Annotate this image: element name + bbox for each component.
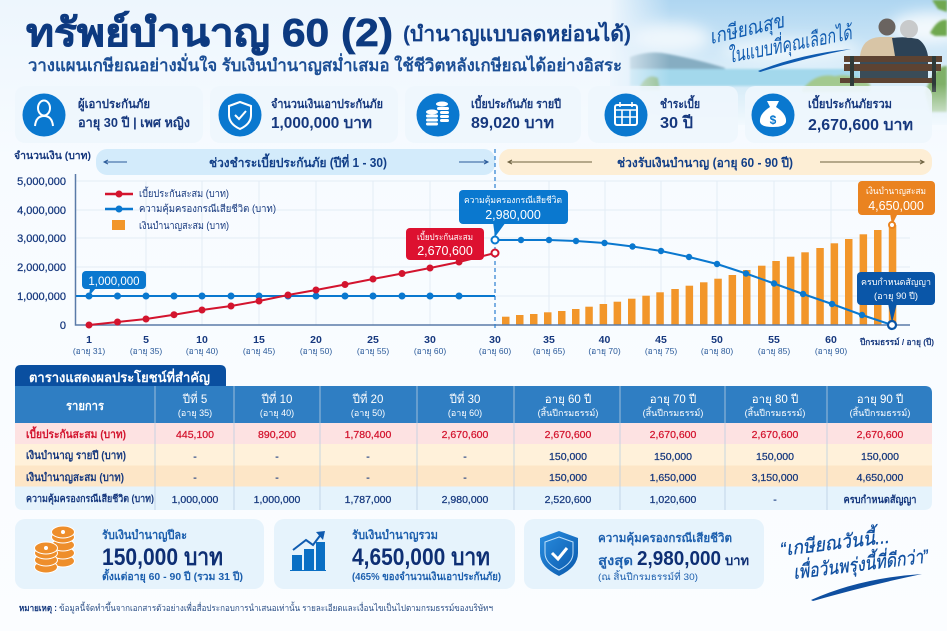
summary card: annual pension: รับเงินบำนาญปีละ (102, 528, 187, 542)
x axis labels: 20 (310, 334, 322, 346)
x axis labels: (อายุ 75) (645, 346, 677, 357)
table row: death coverage: ครบกำหนดสัญญา (844, 494, 917, 506)
callout: accumulated premium (406, 228, 484, 260)
info card: payment term (588, 86, 738, 143)
x axis labels: 40 (599, 334, 610, 346)
callout: accumulated pension (858, 181, 935, 225)
table row: accumulated pension: เงินบำนาญสะสม (บาท) (26, 471, 124, 484)
table header row: อายุ 90 ปี (857, 393, 903, 406)
table header row: (สิ้นปีกรมธรรม์) (643, 406, 703, 418)
summary card: total pension: (465% ของจำนวนเงินเอาประกันภัย) (352, 571, 501, 583)
table header row: อายุ 60 ปี (545, 393, 591, 406)
callout: accumulated pension: 4,650,000 (868, 199, 924, 213)
callout: accumulated premium: 2,670,600 (417, 244, 473, 258)
table row: accumulated premium: 445,100 (176, 429, 214, 441)
table row: death coverage: 2,980,000 (442, 494, 489, 506)
photo: retired couple on bench by the sea (610, 0, 947, 130)
callout: 1,000,000 (82, 271, 146, 296)
summary card: annual pension: ตั้งแต่อายุ 60 - 90 ปี (รวม 31 ปี) (102, 568, 243, 584)
table row: accumulated pension: - (275, 472, 279, 484)
callout: death coverage (459, 190, 568, 237)
summary card: maximum coverage: บาท (725, 553, 749, 568)
table row: accumulated pension: 150,000 (549, 472, 587, 484)
info card: annual premium: 89,020 บาท (471, 115, 554, 132)
table header row: (อายุ 50) (351, 408, 385, 419)
callout: death coverage: 2,980,000 (485, 208, 541, 222)
footnote: หมายเหตุ : ข้อมูลนี้จัดทำขึ้นจากเอกสารตัวอย่างเพื่อสื่อประกอบการนำเสนอเท่านั้น รายละเอียดและเงื่อนไขเป็นไปตามกรมธรรม์ของบริษัทฯ (19, 601, 493, 614)
table row: death coverage: 1,787,000 (345, 494, 392, 506)
summary card: total pension: รับเงินบำนาญรวม (352, 528, 438, 542)
person: man (860, 18, 904, 56)
table row: annual pension: - (275, 451, 279, 463)
table: key benefits (15, 365, 932, 510)
x axis labels: (อายุ 31) (73, 346, 105, 357)
table heading tab (15, 365, 226, 387)
table row: annual pension: - (463, 451, 467, 463)
x axis labels: 60 (825, 334, 837, 346)
summary card: annual pension: 150,000 บาท (102, 544, 223, 571)
table header row: อายุ 80 ปี (752, 393, 798, 406)
y axis labels: 4,000,000 (17, 205, 66, 217)
table row: accumulated pension: - (463, 472, 467, 484)
table row: death coverage: - (773, 494, 777, 506)
summary card: total pension (274, 519, 515, 589)
x axis labels: (อายุ 40) (186, 346, 218, 357)
x axis labels: 10 (196, 334, 208, 346)
table row: accumulated premium: 2,670,600 (857, 429, 904, 441)
table header row: ปีที่ 10 (261, 391, 292, 406)
legend: เงินบำนาญสะสม (บาท) (139, 221, 229, 232)
table row: annual pension: 150,000 (654, 451, 692, 463)
icon: person (22, 94, 66, 136)
title: (บำนาญแบบลดหย่อนได้) (403, 21, 631, 47)
table row: death coverage: 1,020,600 (650, 494, 697, 506)
band: premium payment period: ช่วงชำระเบี้ยประกันภัย (ปีที่ 1 - 30) (209, 153, 387, 170)
info card: payment term: ชำระเบี้ย (660, 94, 700, 111)
line: death coverage before age 60 (76, 292, 495, 300)
callout: accumulated pension: เงินบำนาญสะสม (866, 186, 926, 196)
x axis labels: 35 (543, 334, 555, 346)
icon: orange coins (34, 526, 74, 573)
icon: coins (416, 94, 460, 136)
x axis labels: 25 (367, 334, 379, 346)
callout: contract maturity: (อายุ 90 ปี) (874, 291, 918, 302)
info card: insured person (15, 86, 203, 143)
info card: insured person: อายุ 30 ปี | เพศ หญิง (78, 115, 190, 131)
x axis labels: 55 (768, 334, 780, 346)
x axis labels: (อายุ 35) (130, 346, 162, 357)
table row: accumulated premium: 2,670,600 (442, 429, 489, 441)
table row: accumulated pension: 1,650,000 (650, 472, 697, 484)
icon: money bag (752, 94, 794, 136)
table header row: อายุ 70 ปี (650, 393, 696, 406)
info card: payment term: 30 ปี (660, 113, 693, 132)
table row: death coverage: 1,000,000 (254, 494, 301, 506)
callout: contract maturity: ครบกำหนดสัญญา (861, 277, 931, 287)
bars: accumulated pension (502, 225, 896, 325)
title: ทรัพย์บำนาญ 60 (2) (26, 10, 393, 56)
person: woman (892, 20, 928, 56)
x axis labels (73, 334, 847, 357)
x axis labels: 50 (711, 334, 723, 346)
x axis labels: (อายุ 55) (357, 346, 389, 357)
band: pension period (499, 149, 932, 175)
legend: เบี้ยประกันสะสม (บาท) (139, 186, 229, 200)
x axis labels: (อายุ 65) (533, 346, 565, 357)
table row: accumulated pension: 4,650,000 (857, 472, 904, 484)
info card: total premium: 2,670,600 บาท (808, 117, 913, 134)
x axis labels: (อายุ 90) (815, 346, 847, 357)
info card: insured person: ผู้เอาประกันภัย (78, 97, 150, 112)
icon: growth chart (290, 531, 326, 570)
band: premium payment period (96, 149, 495, 175)
x axis labels: (อายุ 60) (479, 346, 511, 357)
table row: accumulated premium: 2,670,600 (545, 429, 592, 441)
table row: accumulated premium: 890,200 (258, 429, 296, 441)
table row: accumulated premium (15, 423, 932, 444)
callout: contract maturity (857, 272, 935, 323)
axis title: จำนวนเงิน (บาท) (14, 150, 91, 162)
summary card: maximum coverage: สูงสุด (598, 553, 633, 569)
line: accumulated premium (86, 253, 495, 328)
x axis labels: (อายุ 50) (300, 346, 332, 357)
summary card: maximum coverage: ความคุ้มครองกรณีเสียชีวิต (598, 531, 732, 546)
info card: total premium: เบี้ยประกันภัยรวม (808, 94, 892, 111)
title (26, 10, 631, 56)
table row: annual pension: - (366, 451, 370, 463)
x axis labels: (อายุ 45) (243, 346, 275, 357)
callout: 1,000,000: 1,000,000 (88, 276, 140, 288)
x axis labels: (อายุ 70) (588, 346, 621, 357)
x axis labels: 15 (253, 334, 265, 346)
table header row: (อายุ 60) (448, 408, 482, 419)
info card: sum insured (210, 86, 398, 143)
x axis labels: (อายุ 80) (701, 346, 733, 357)
table row: accumulated premium: 2,670,600 (752, 429, 799, 441)
table row: accumulated premium: 1,780,400 (345, 429, 392, 441)
table row: accumulated pension: - (366, 472, 370, 484)
y axis labels: 5,000,000 (17, 176, 66, 188)
chart: premiums, death coverage, accumulated pension: ปีกรมธรรม์ / อายุ (ปี) (860, 337, 934, 348)
summary card: maximum coverage: 2,980,000 (637, 548, 721, 570)
summary card: maximum coverage (524, 519, 764, 589)
icon: calendar (604, 94, 648, 136)
chart: premiums, death coverage, accumulated pension (14, 149, 935, 357)
info card: annual premium: เบี้ยประกันภัย รายปี (471, 94, 561, 111)
table row: annual pension: 150,000 (549, 451, 587, 463)
line: death coverage after age 60 (495, 237, 892, 325)
x axis labels: (อายุ 60) (414, 346, 446, 357)
slogan: retire happy: ในแบบที่คุณเลือกได้ (725, 18, 857, 69)
slogan: retire happy (707, 10, 857, 72)
x axis labels: (อายุ 85) (758, 346, 790, 357)
table row: death coverage: 1,000,000 (172, 494, 219, 506)
band: pension period: ช่วงรับเงินบำนาญ (อายุ 60 - 90 ปี) (617, 156, 793, 171)
table row: accumulated pension: - (193, 472, 197, 484)
icon: blue shield (540, 531, 578, 576)
table header row: ปีที่ 30 (449, 391, 480, 406)
legend (105, 186, 276, 232)
table header row: (อายุ 40) (260, 408, 294, 419)
table row: accumulated pension: 3,150,000 (752, 472, 799, 484)
y axis labels: 2,000,000 (17, 262, 66, 274)
icon: shield (218, 94, 262, 136)
y axis labels: 0 (60, 320, 66, 332)
x axis labels: 30 (424, 334, 436, 346)
table header row: ปีที่ 20 (352, 391, 383, 406)
subtitle: วางแผนเกษียณอย่างมั่นใจ รับเงินบำนาญสม่ำเสมอ ใช้ชีวิตหลังเกษียณได้อย่างอิสระ (28, 53, 622, 76)
info card: annual premium (405, 86, 581, 143)
icon: money bag: $ (770, 113, 777, 127)
table header row: รายการ (66, 399, 105, 413)
table row: annual pension: - (193, 451, 197, 463)
callout: accumulated premium: เบี้ยประกันสะสม (417, 230, 473, 242)
closing quote (778, 522, 931, 601)
y axis labels: 1,000,000 (17, 291, 66, 303)
table header row (15, 386, 932, 423)
axes (76, 174, 910, 325)
table row: death coverage: ความคุ้มครองกรณีเสียชีวิต (บาท) (26, 493, 154, 505)
x axis labels: 5 (143, 334, 149, 346)
table row: annual pension (15, 444, 932, 466)
summary card: maximum coverage: (ณ สิ้นปีกรมธรรม์ที่ 30) (598, 570, 698, 583)
table row: annual pension: 150,000 (861, 451, 899, 463)
table header row: (สิ้นปีกรมธรรม์) (745, 406, 805, 418)
x axis labels: 30 (489, 334, 501, 346)
info card: sum insured: จำนวนเงินเอาประกันภัย (271, 97, 383, 111)
table heading tab: ตารางแสดงผลประโยชน์ที่สำคัญ (29, 368, 210, 386)
info card: total premium (745, 86, 932, 143)
table header row: ปีที่ 5 (182, 391, 207, 406)
legend: ความคุ้มครองกรณีเสียชีวิต (บาท) (139, 203, 276, 215)
y axis labels (17, 176, 66, 332)
callout: death coverage: ความคุ้มครองกรณีเสียชีวิต (464, 195, 562, 206)
table row: death coverage (15, 486, 932, 510)
table row: accumulated premium: 2,670,600 (650, 429, 697, 441)
x axis labels: 45 (655, 334, 667, 346)
table row: death coverage: 2,520,600 (545, 494, 592, 506)
x axis labels: 1 (86, 334, 92, 346)
table row: accumulated pension (15, 466, 932, 486)
table row: annual pension: เงินบำนาญ รายปี (บาท) (26, 449, 126, 462)
bench (840, 56, 942, 92)
info card: sum insured: 1,000,000 บาท (271, 115, 372, 132)
summary card: total pension: 4,650,000 บาท (352, 544, 490, 571)
table row: annual pension: 150,000 (756, 451, 794, 463)
table header row: (สิ้นปีกรมธรรม์) (850, 406, 910, 418)
y axis labels: 3,000,000 (17, 233, 66, 245)
table header row: (อายุ 35) (178, 408, 212, 419)
slogan: retire happy: เกษียณสุข (707, 10, 788, 50)
table row: accumulated premium: เบี้ยประกันสะสม (บาท) (26, 426, 126, 441)
closing quote: “เกษียณวันนี้... (778, 522, 891, 561)
table header row: (สิ้นปีกรมธรรม์) (538, 406, 598, 418)
summary card: annual pension (15, 519, 264, 589)
